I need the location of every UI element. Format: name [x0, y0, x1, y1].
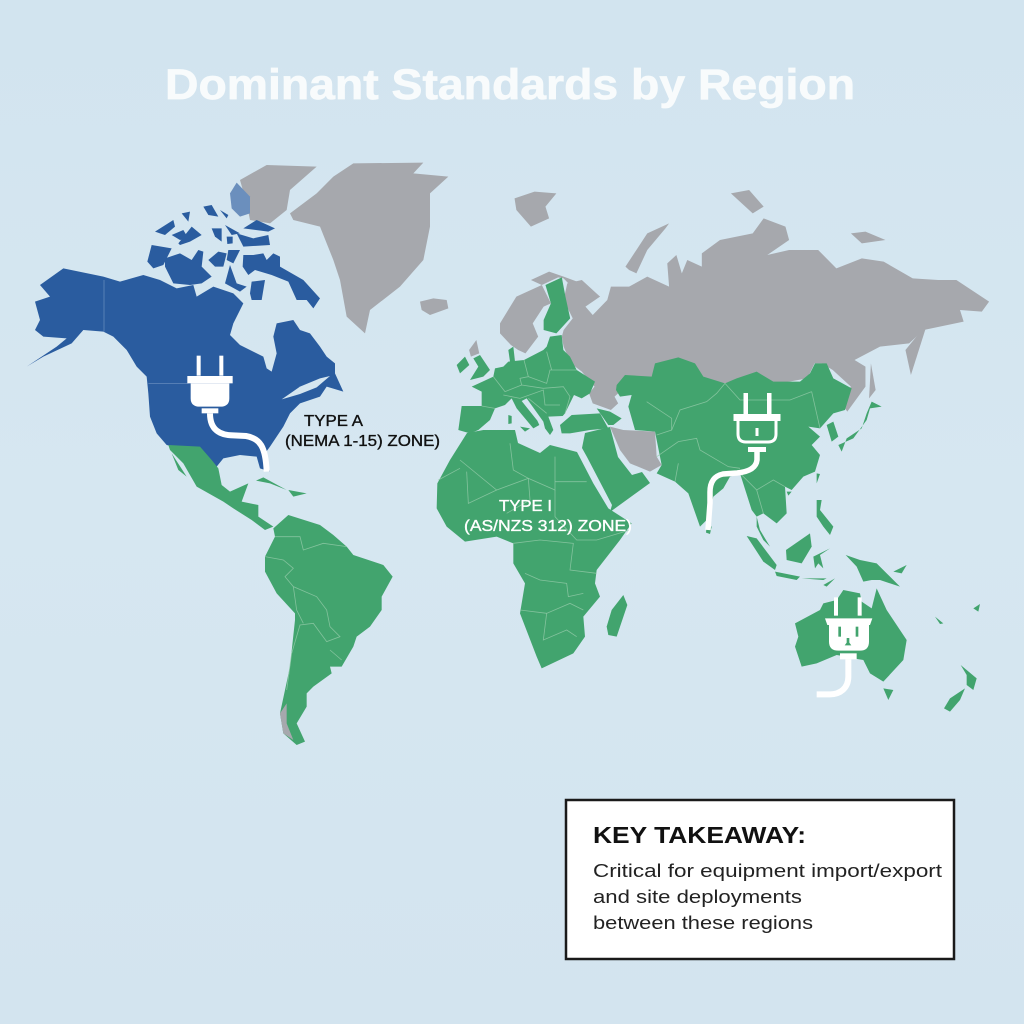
map region: Type A zone, Canadian Arctic islands [147, 183, 320, 308]
callout body [593, 860, 942, 933]
label: Type I zone: TYPE I [499, 498, 552, 515]
callout body: between these regions [593, 912, 813, 933]
map region: Type I zone, Southeast Asia and Oceania [747, 500, 980, 712]
label: Type I zone [464, 498, 632, 535]
map region: Russia and Scandinavia (no zone) [469, 190, 989, 412]
map region: Greenland and Arctic (no zone) [240, 163, 448, 333]
map region: Type I zone, Europe and Near East [457, 335, 622, 435]
callout body: Critical for equipment import/export [593, 860, 942, 881]
label: Type A zone: (NEMA 1-15) ZONE) [285, 433, 440, 450]
icon: Type I plug, Australia [817, 597, 872, 694]
callout heading: KEY TAKEAWAY: [593, 822, 806, 848]
map region: Type I zone, Arabia [582, 427, 650, 512]
map region: Type I zone, Latin America [168, 445, 393, 745]
map region: Type I zone, Africa [437, 430, 632, 668]
world map [27, 163, 989, 745]
label: Type I zone: (AS/NZS 312) ZONE) [464, 518, 632, 535]
map region: Type I zone, Asia [610, 357, 882, 547]
icon: Type I plug, Asia [708, 393, 780, 530]
callout body: and site deployments [593, 886, 802, 907]
title: Dominant Standards by Region [165, 61, 855, 109]
map region: Type A zone, North America [27, 268, 343, 472]
callout: key takeaway [566, 800, 954, 959]
icon: Type A plug [187, 356, 267, 472]
label: Type A zone: TYPE A [304, 413, 364, 430]
label: Type A zone [285, 413, 440, 450]
